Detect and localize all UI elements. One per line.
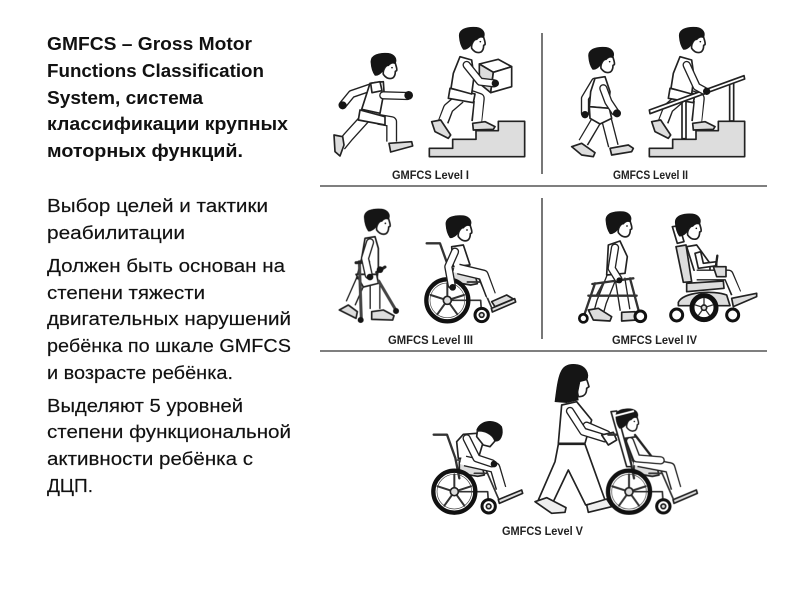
- figure: running boy: [334, 53, 413, 156]
- label: Level II: GMFCS Level II: [613, 170, 688, 182]
- figure: supported child in wheelchair: [608, 409, 697, 513]
- title: System, система: [47, 88, 204, 108]
- title: классификации крупных: [47, 114, 288, 134]
- panel: GMFCS Level V: [433, 364, 697, 538]
- figure: stairs: [429, 121, 525, 157]
- figure: walking boy: [572, 47, 633, 157]
- text block: rehabilitation goals: Выбор целей и тактики: [47, 195, 268, 216]
- figure: boy with walker: [579, 212, 646, 322]
- text block: basis of the choice: Должен быть основан на: [47, 255, 286, 276]
- text block: five levels: степени функциональной: [47, 421, 291, 442]
- text block: basis of the choice: и возрасте ребёнка.: [47, 362, 233, 383]
- title: Functions Classification: [47, 61, 264, 81]
- panel: GMFCS Level III: [339, 209, 516, 347]
- text block: basis of the choice: ребёнка по шкале GMFCS: [47, 335, 291, 356]
- figure: boy carrying a box: [432, 27, 512, 138]
- figure: boy in wheelchair: [426, 216, 516, 322]
- text block: rehabilitation goals: [47, 195, 268, 243]
- text block: basis of the choice: степени тяжести: [47, 282, 205, 303]
- panel: GMFCS Level II: [572, 27, 745, 182]
- text block: five levels: [47, 395, 291, 496]
- label: Level III: GMFCS Level III: [388, 335, 473, 347]
- label: Level I: GMFCS Level I: [392, 170, 469, 182]
- figure: boy in power wheelchair: [671, 214, 757, 321]
- title: моторных функций.: [47, 141, 243, 161]
- title: [47, 34, 288, 161]
- label: Level V: GMFCS Level V: [502, 526, 583, 538]
- figure: boy climbing with railing: [649, 27, 745, 138]
- text block: rehabilitation goals: реабилитации: [47, 222, 185, 243]
- panel: GMFCS Level IV: [579, 212, 757, 347]
- figure: slumped child in wheelchair: [433, 421, 523, 513]
- title: GMFCS – Gross Motor: [47, 34, 252, 54]
- text block: five levels: активности ребёнка с: [47, 448, 253, 469]
- text block: basis of the choice: [47, 255, 291, 383]
- figure: boy with crutches: [339, 209, 399, 323]
- text block: basis of the choice: двигательных нарушений: [47, 308, 291, 329]
- text block: five levels: ДЦП.: [47, 475, 93, 496]
- text block: five levels: Выделяют 5 уровней: [47, 395, 243, 416]
- panel: GMFCS Level I: [334, 27, 525, 182]
- label: Level IV: GMFCS Level IV: [612, 335, 697, 347]
- figure: caregiver pushing wheelchair: [535, 364, 617, 513]
- figure: stairs with railing: [649, 82, 745, 157]
